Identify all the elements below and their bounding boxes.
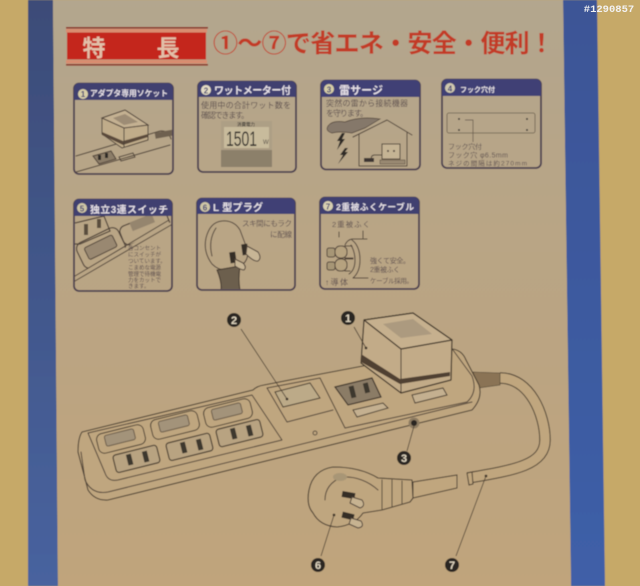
callout 1 bbox=[341, 311, 355, 325]
AC adapter bbox=[361, 313, 452, 393]
heading banner bbox=[66, 27, 208, 66]
panel 6: L-shaped plug bbox=[197, 198, 295, 290]
wattage display: W bbox=[263, 140, 269, 146]
callout 7 bbox=[445, 558, 459, 572]
meter window bbox=[275, 383, 320, 407]
plug illustration bbox=[308, 467, 413, 528]
panel 3: lightning surge: 突然の雷から接続機器 bbox=[326, 98, 408, 108]
panel 6: L-shaped plug: スキ間にもラク bbox=[242, 219, 292, 228]
wattage display: 消費電力 bbox=[237, 121, 255, 128]
panel 3: lightning surge bbox=[321, 80, 420, 170]
callout 6 bbox=[311, 558, 325, 572]
right blue edge bbox=[563, 0, 605, 586]
callout 3: 3 bbox=[401, 453, 407, 465]
panel 4: hook holes bbox=[442, 79, 541, 168]
panel 7: double insulated cable: 強くて安全。 bbox=[370, 256, 410, 265]
panel 7: double insulated cable bbox=[320, 197, 419, 289]
callout 2: 2 bbox=[231, 315, 237, 327]
left blue edge bbox=[28, 0, 58, 586]
panel 7: double insulated cable: ↑導体 bbox=[325, 277, 348, 287]
watermark id: #1290857 bbox=[584, 4, 634, 16]
surge lamp bbox=[408, 418, 420, 428]
panel 7: double insulated cable: 2重被ふく bbox=[332, 219, 370, 229]
heading banner: 特 bbox=[82, 35, 106, 61]
panel 4: hook holes: フック穴付 bbox=[460, 85, 495, 94]
panel 5: independent switches: 各コンセント bbox=[128, 244, 161, 252]
panel 5: independent switches: ついています。 bbox=[128, 258, 166, 265]
panel 2: watt meter: ワットメーター付 bbox=[214, 84, 291, 97]
panel 2: watt meter: 確認できます。 bbox=[201, 110, 249, 120]
panel 3: lightning surge: を守ります。 bbox=[326, 109, 368, 118]
panel 3: lightning surge: 3 bbox=[327, 86, 332, 94]
callout 1: 1 bbox=[345, 313, 351, 325]
panel 4: hook holes: 4 bbox=[448, 84, 453, 94]
panel 1: adapter socket: アダプタ専用ソケット bbox=[90, 88, 168, 98]
panel 4: hook holes: ネジの間隔は約270mm bbox=[448, 158, 527, 168]
power strip illustration bbox=[78, 349, 480, 500]
switch closeup bbox=[74, 215, 171, 269]
wattage display bbox=[221, 121, 272, 167]
heading banner: 長 bbox=[156, 35, 180, 61]
panel 4: hook holes: フック穴 φ6.5mm bbox=[448, 152, 508, 160]
house and TV bbox=[353, 120, 412, 166]
panel 5: independent switches: 独立3連スイッチ bbox=[90, 203, 168, 216]
callout 3 bbox=[397, 451, 411, 465]
panel 5: independent switches bbox=[74, 199, 172, 291]
plug illustration bbox=[205, 221, 260, 290]
callout 7: 7 bbox=[449, 560, 455, 572]
panel 1: adapter socket bbox=[74, 83, 175, 174]
outlets and switches bbox=[95, 378, 447, 473]
panel 5: independent switches: こまめな電源 bbox=[128, 264, 162, 272]
storm cloud and lightning bbox=[327, 118, 380, 164]
panel 5: independent switches: 5 bbox=[80, 204, 85, 214]
panel 7: double insulated cable: 2重被ふく bbox=[370, 265, 400, 274]
strip outline with holes bbox=[447, 113, 535, 142]
panel 7: double insulated cable: ケーブル採用。 bbox=[370, 276, 413, 285]
wattage display: 1501 bbox=[226, 128, 257, 151]
panel 5: independent switches: きます。 bbox=[128, 283, 149, 290]
panel 6: L-shaped plug: 6 bbox=[203, 204, 208, 212]
panel 2: watt meter bbox=[198, 81, 296, 172]
panel 7: double insulated cable: 7 bbox=[326, 202, 331, 212]
panel 2: watt meter: 2 bbox=[204, 86, 209, 96]
heading text: ①～⑦で省エネ・安全・便利！ bbox=[213, 30, 554, 58]
panel 3: lightning surge: 雷サージ bbox=[339, 84, 383, 97]
panel 5: independent switches: にスイッチが bbox=[128, 250, 162, 258]
callout leader lines bbox=[241, 327, 487, 556]
panel 7: double insulated cable: 2重被ふくケーブル bbox=[336, 201, 414, 212]
panel 1: adapter socket: 1 bbox=[81, 90, 86, 99]
callout 6: 6 bbox=[315, 560, 321, 572]
panel 2: watt meter: 使用中の合計ワット数を bbox=[201, 100, 291, 110]
cord bbox=[413, 372, 545, 498]
panel 6: L-shaped plug: L 型プラグ bbox=[213, 201, 263, 214]
panel 6: L-shaped plug: に配線 bbox=[270, 229, 292, 239]
panel 5: independent switches: 管理で待機電 bbox=[128, 270, 162, 278]
panel 5: independent switches: 力をカットで bbox=[128, 276, 162, 284]
panel 4: hook holes: フック穴付 bbox=[448, 142, 482, 151]
cable section bbox=[327, 231, 368, 278]
strip body bbox=[78, 349, 480, 500]
callout 2 bbox=[227, 313, 241, 327]
